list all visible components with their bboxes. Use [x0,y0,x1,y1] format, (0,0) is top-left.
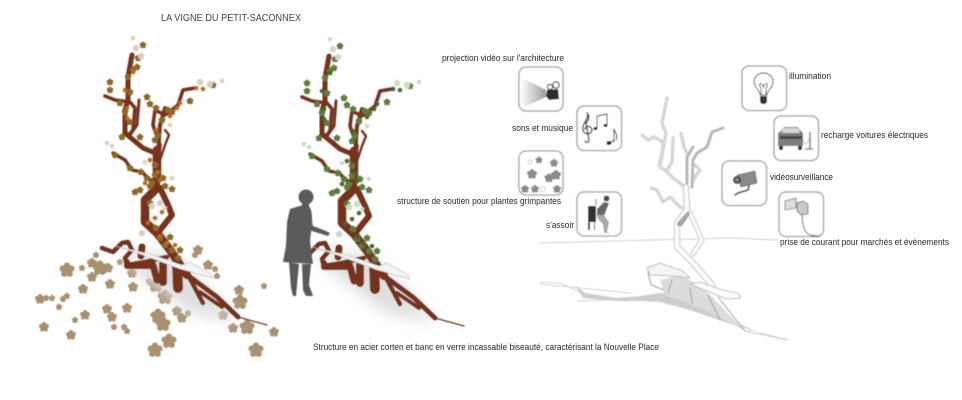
silhouette of a woman [283,190,330,296]
label: illumination: illumination [789,71,831,81]
icon: climbing plants [519,151,563,195]
label: sounds and music: sons et musique [512,123,573,133]
sketch trunk [677,187,712,285]
icon: electric car charging [774,116,818,160]
vine sculpture: corten steel with autumn leaves [102,36,267,325]
label: power socket: prise de courant pour marchés et évènements [780,237,949,247]
sketch bench and base [660,275,745,331]
vine sculpture: steel with green leaves [299,37,464,326]
grey branches [642,98,700,208]
title: LA VIGNE DU PETIT-SACONNEX [161,12,301,24]
thin shadow lines [540,282,788,340]
icon: light bulb [742,66,786,110]
icon: musical notes [577,106,622,150]
icon: power socket and plug [779,192,824,236]
icon: video projector [519,67,563,111]
label: sit: s'assoir [546,220,574,230]
caption: Structure en acier corten et banc en verre incassable biseauté, caractérisant la Nouvelle Place [313,342,659,352]
horizon line [539,238,778,243]
fallen leaves on the ground [35,245,279,357]
label: electric car charging: recharge voitures électriques [821,130,928,140]
icon: seated person [577,192,622,236]
label: climbing plant support: structure de soutien pour plantes grimpantes [397,196,561,206]
label: video surveillance: vidéosurveillance [770,172,833,182]
cast shadow [575,285,760,333]
label: video projection: projection vidéo sur l'architecture [442,53,564,63]
sketch of the structure in grey [539,98,788,340]
icon: surveillance camera [722,161,766,206]
